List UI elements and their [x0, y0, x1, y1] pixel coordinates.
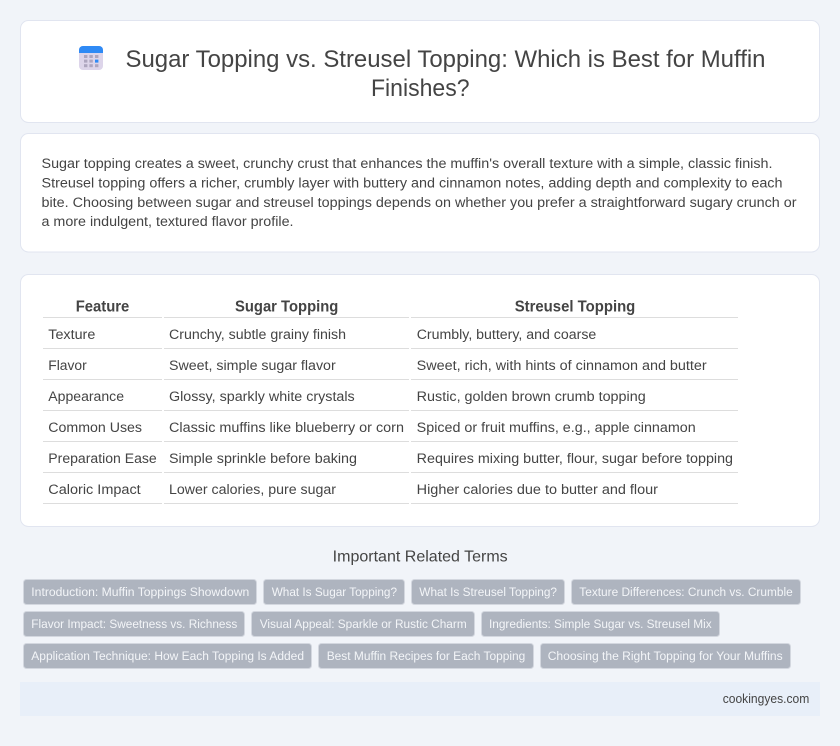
row: texture: Crumbly, buttery, and coarse [417, 327, 596, 343]
footer bar [20, 682, 820, 716]
row: common uses: Common Uses [48, 420, 142, 436]
intro paragraph: Streusel topping offers a richer, crumbly layer with buttery and cinnamon notes, adding depth and complexity to each [42, 176, 783, 192]
row: caloric impact: Higher calories due to butter and flour [417, 482, 658, 498]
tag: Visual Appeal: Sparkle or Rustic Charm [260, 617, 467, 631]
row: flavor: Sweet, simple sugar flavor [169, 358, 336, 374]
row: preparation ease [43, 451, 738, 473]
tag [24, 580, 256, 604]
tag: Choosing the Right Topping for Your Muffins [548, 649, 783, 663]
row: common uses [43, 420, 738, 442]
row: texture [43, 327, 738, 349]
tag [24, 612, 244, 636]
intro paragraph [42, 156, 797, 230]
table header: Sugar Topping [235, 299, 338, 316]
tag [318, 644, 534, 668]
table header: Feature [76, 299, 129, 316]
row: flavor [43, 358, 738, 380]
row: texture: Texture [48, 327, 95, 343]
heading: important related terms: Important Related Terms [333, 549, 508, 566]
tag: Best Muffin Recipes for Each Topping [327, 649, 525, 663]
row: texture: Crunchy, subtle grainy finish [169, 327, 346, 343]
row: preparation ease: Preparation Ease [48, 451, 157, 467]
tag: What Is Sugar Topping? [272, 585, 397, 599]
tag: What Is Streusel Topping? [419, 585, 557, 599]
row: caloric impact: Lower calories, pure sugar [169, 482, 336, 498]
panel: introduction [20, 134, 820, 252]
row: flavor: Sweet, rich, with hints of cinnamon and butter [417, 358, 707, 374]
title text: Sugar Topping vs. Streusel Topping: Which is Best for Muffin [126, 46, 766, 73]
row: appearance: Rustic, golden brown crumb topping [417, 389, 646, 405]
row: appearance [43, 389, 738, 411]
tag [540, 644, 790, 668]
tag [482, 612, 720, 636]
intro paragraph: a more indulgent, textured flavor profile. [42, 214, 294, 230]
table header: Streusel Topping [515, 299, 635, 316]
row: appearance: Glossy, sparkly white crystals [169, 389, 355, 405]
table header [43, 299, 738, 318]
tag [264, 580, 404, 604]
tag: Flavor Impact: Sweetness vs. Richness [31, 617, 237, 631]
footer source text: cookingyes.com [723, 691, 809, 706]
tag: Ingredients: Simple Sugar vs. Streusel Mix [489, 617, 712, 631]
row: caloric impact [43, 482, 738, 504]
row: caloric impact: Caloric Impact [48, 482, 141, 498]
row: flavor: Flavor [48, 358, 87, 374]
row: preparation ease: Requires mixing butter, flour, sugar before topping [417, 451, 733, 467]
title text: Finishes? [371, 75, 470, 102]
row: common uses: Classic muffins like blueberry or corn [169, 420, 404, 436]
icon: calendar [79, 46, 103, 70]
tag [412, 580, 564, 604]
row: appearance: Appearance [48, 389, 124, 405]
intro paragraph: bite. Choosing between sugar and streusel toppings depends on whether you prefer a straightforward sugary crunch or [42, 195, 797, 211]
title text [126, 46, 766, 102]
row: common uses: Spiced or fruit muffins, e.g., apple cinnamon [417, 420, 696, 436]
tag: Introduction: Muffin Toppings Showdown [31, 585, 249, 599]
tag [24, 644, 312, 668]
tag [572, 580, 800, 604]
panel: comparison table [20, 274, 820, 526]
tag: Application Technique: How Each Topping Is Added [31, 649, 304, 663]
panel: title [20, 20, 820, 122]
tag: Texture Differences: Crunch vs. Crumble [579, 585, 793, 599]
row: preparation ease: Simple sprinkle before baking [169, 451, 357, 467]
intro paragraph: Sugar topping creates a sweet, crunchy crust that enhances the muffin's overall texture with a simple, classic finish. [42, 156, 772, 172]
tag [252, 612, 474, 636]
related terms tags [24, 580, 800, 668]
